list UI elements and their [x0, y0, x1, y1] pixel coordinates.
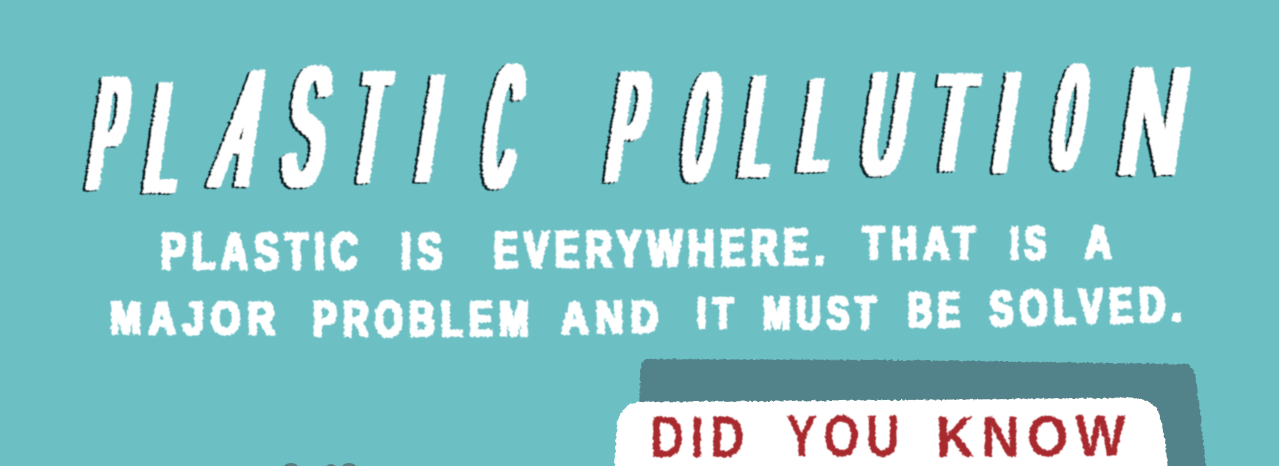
panel: did you know [614, 359, 1206, 466]
title: O [1045, 34, 1096, 199]
subtitle: A [1085, 216, 1119, 268]
panel heading [650, 403, 1133, 466]
title: C [474, 30, 533, 224]
title: L [138, 50, 194, 226]
title: I [986, 41, 1027, 203]
title: L [734, 46, 785, 208]
title: T [924, 44, 984, 200]
subtitle: PROBLEM [313, 291, 535, 347]
subtitle [110, 216, 1188, 347]
subtitle: AND [560, 290, 666, 344]
subtitle: BE [908, 282, 966, 338]
bottom illustration tips [284, 463, 356, 466]
subtitle: MAJOR [110, 292, 282, 344]
subtitle: MUST [763, 287, 882, 339]
title: P [81, 43, 138, 224]
title [81, 30, 1198, 226]
subtitle: THAT [863, 217, 982, 269]
subtitle: EVERYWHERE. [494, 218, 831, 280]
title: O [675, 41, 730, 213]
panel card [614, 398, 1168, 466]
subtitle: IT [697, 289, 740, 338]
panel shadow [637, 359, 1206, 466]
title: P [600, 39, 659, 216]
subtitle: PLASTIC [161, 223, 364, 281]
subtitle: SOLVED. [989, 276, 1188, 337]
title: S [274, 32, 341, 222]
title: T [346, 37, 397, 216]
title: U [854, 41, 920, 205]
subtitle: IS [1010, 217, 1052, 269]
title: L [794, 52, 842, 200]
title: N [1112, 35, 1198, 207]
subtitle: IS [401, 223, 448, 281]
title: I [410, 43, 451, 214]
title: A [202, 35, 285, 221]
